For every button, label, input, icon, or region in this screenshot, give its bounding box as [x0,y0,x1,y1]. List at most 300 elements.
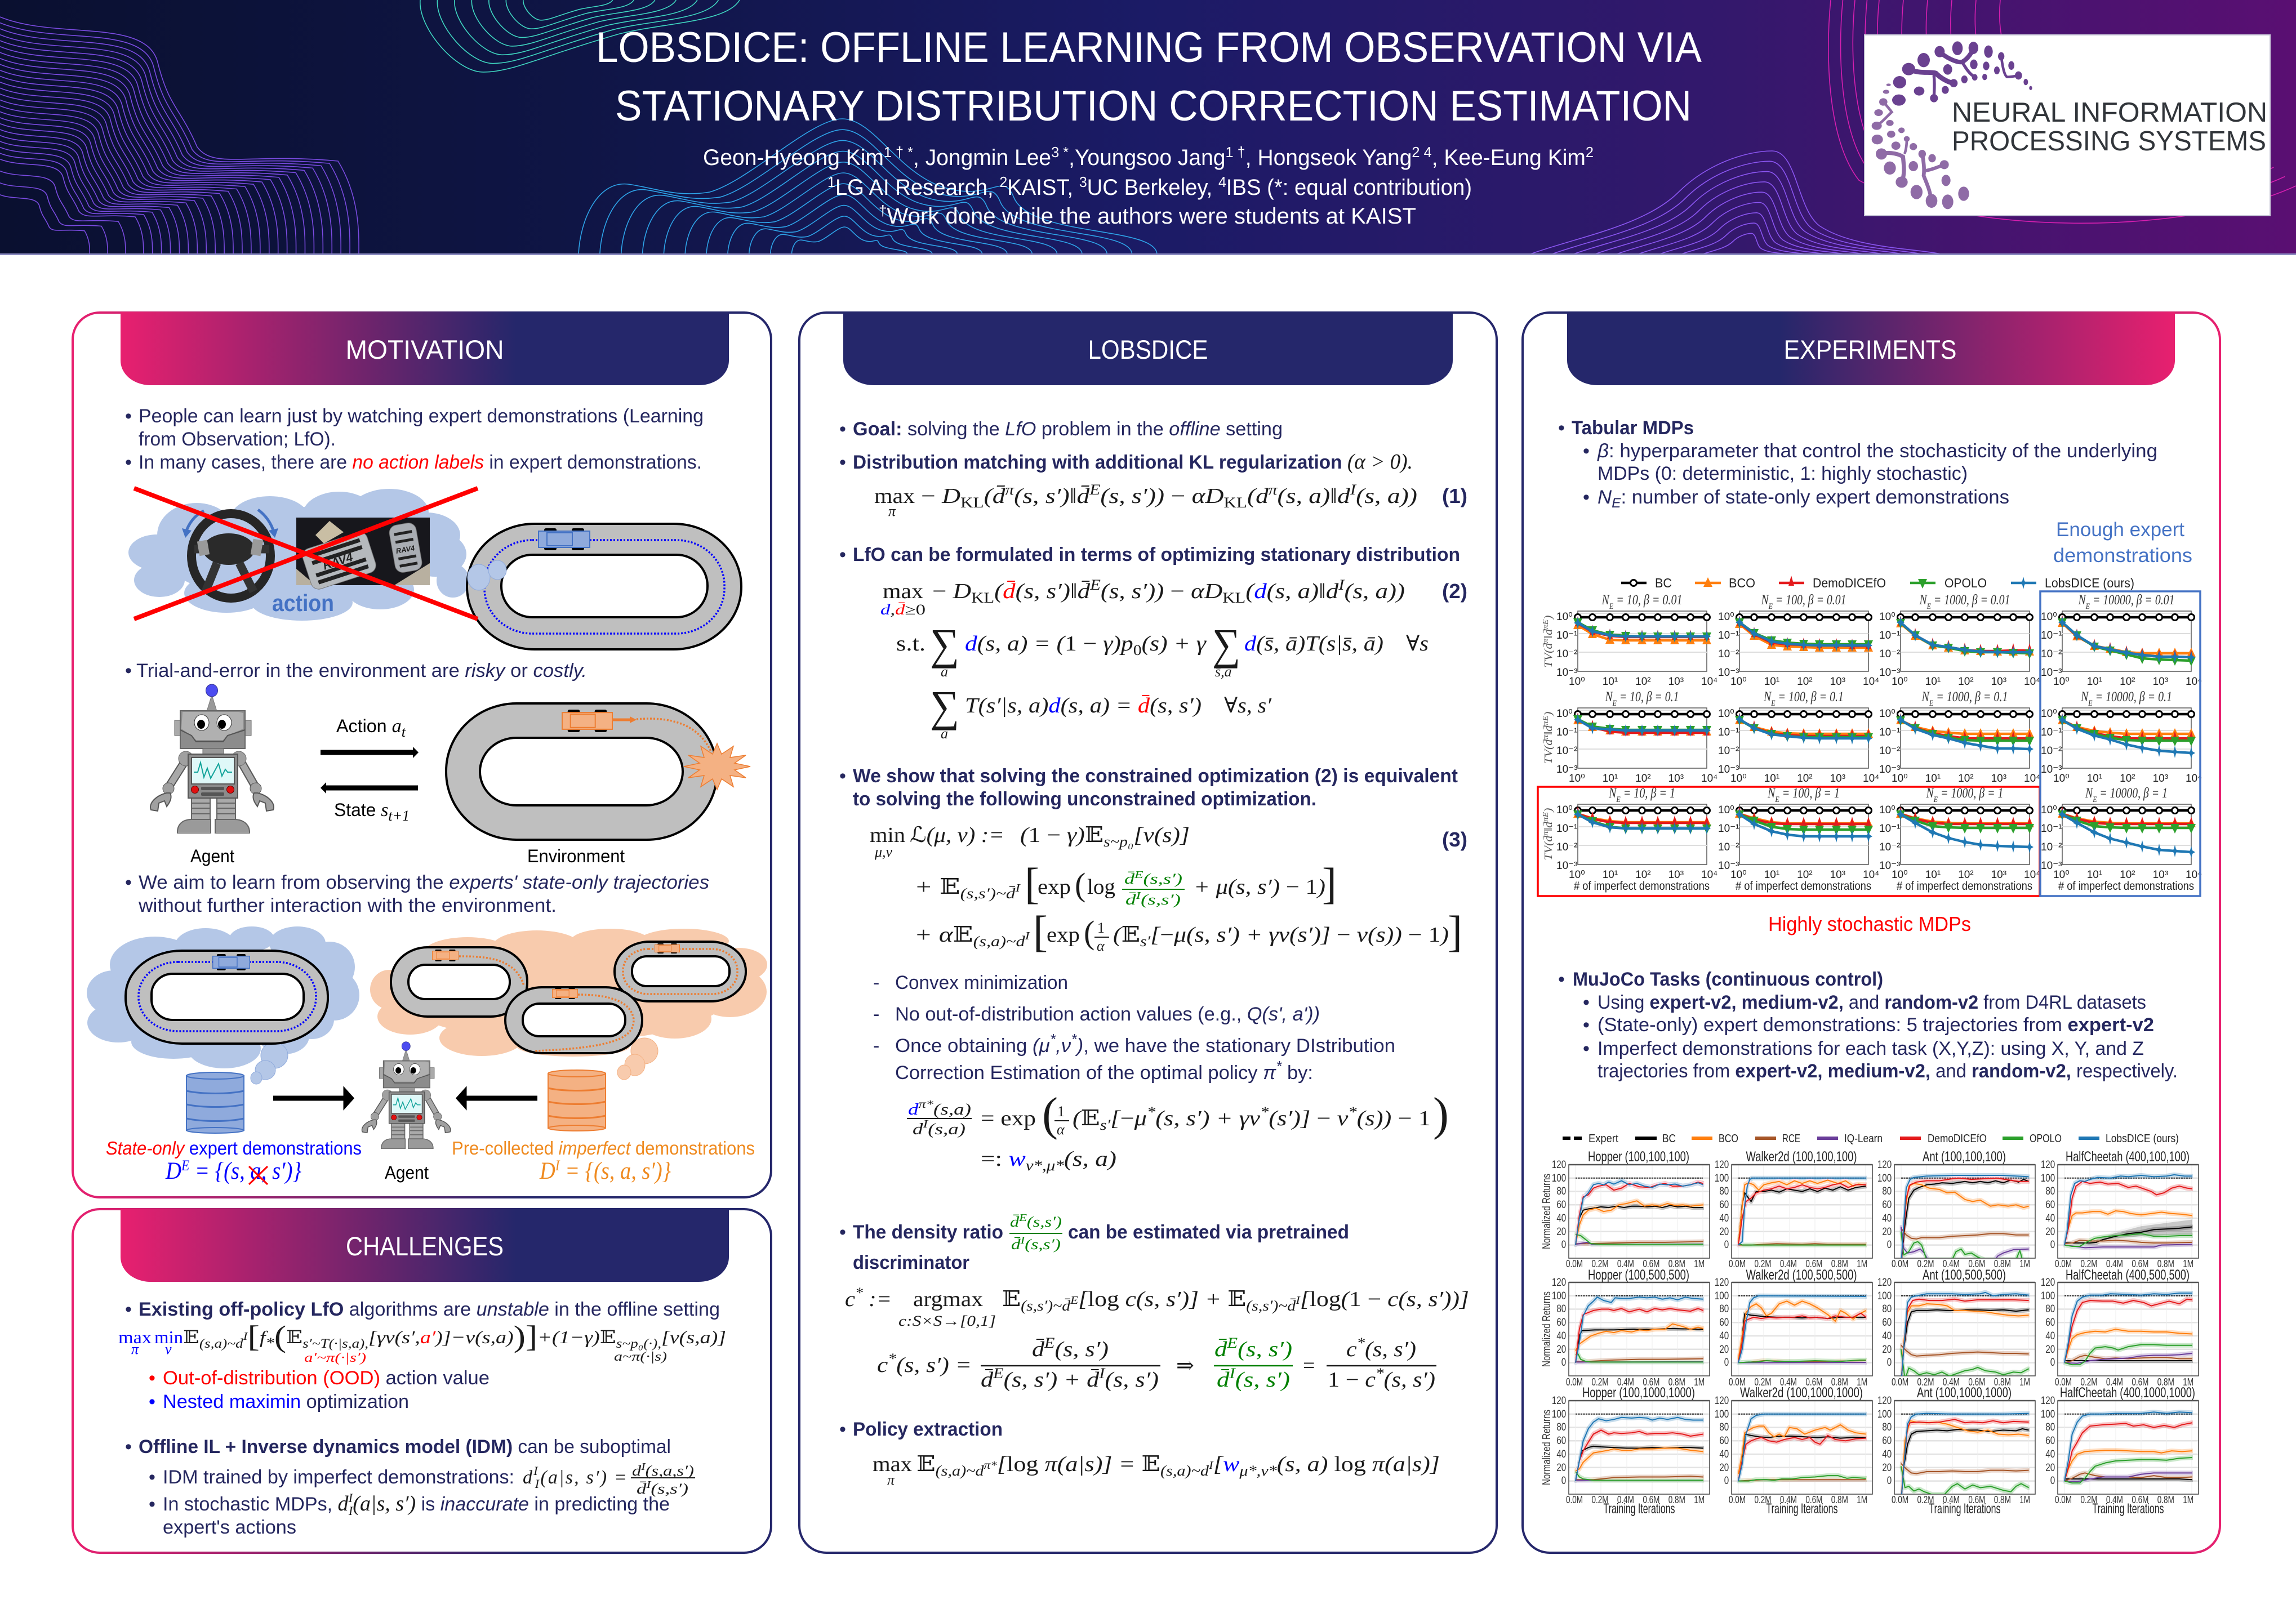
chart: Walker2d 100,100,100: 100 [1715,1171,1729,1184]
legend: tabular: BC [1655,576,1672,590]
chart: NE 10000 beta 0.01: 10⁻¹ [2041,630,2062,641]
text: learning from observation: • [125,406,132,427]
icon: pedals photo: RAV4 [321,551,355,573]
chart: Hopper 100,100,100 [1552,1149,1710,1269]
text: MuJoCo tasks: Using expert-v2, medium-v2, and random-v2 from D4RL datasets [1598,992,2146,1013]
chart: NE 10000 beta 1: 10⁰ 10¹ 10² 10³ 10⁴ [2053,869,2202,881]
equation: policy extraction: 𝔼(s,a)~d π*[log π(a|s)] = 𝔼(s,a)~d I[wμ*,ν*(s, a) log π(a|s)] [916,1452,1440,1479]
chart: NE 1000 beta 0.1: 10⁻¹ [1879,727,1901,738]
chart: NE 1000 beta 1: # of imperfect demonstrations [1897,880,2032,893]
chart: NE 100 beta 0.01: NE = 100, β = 0.01 [1761,592,1846,611]
text: density ratio: can be estimated via pretrained [1068,1222,1349,1243]
equation 3 [870,823,1467,956]
chart: Ant 100,100,100: 60 [1882,1198,1892,1210]
equation: optimal ratio: α [1057,1121,1065,1138]
formula: offline LfO objective: max [118,1327,152,1347]
text: tabular MDPs: β: hyperparameter that control the stochasticity of the underlying [1597,440,2157,462]
red cross over actions [134,488,478,619]
chart: Walker2d 100,500,500: 40 [1719,1329,1729,1342]
y axis labels: Normalized Returns [1541,1291,1553,1367]
chart: NE 10 beta 1: 10⁻¹ [1556,823,1577,835]
title: LOBSDICE: OFFLINE LEARNING FROM OBSERVATION VIA [596,24,1702,72]
chart: Hopper 100,100,100: Hopper (100,100,100) [1588,1149,1689,1165]
equation: policy extraction: π [887,1472,895,1488]
chart: Ant 100,100,100: 40 [1882,1211,1892,1224]
equation: policy extraction [873,1452,1440,1488]
panel: challenges [73,1209,771,1553]
chart: NE 1000 beta 0.01: NE = 1000, β = 0.01 [1919,592,2010,611]
y axis labels: TV(d̄π‖d̄πE) [1542,615,1555,667]
equation 3: exp [1038,875,1071,899]
icon: imperfect database [548,1070,606,1131]
chart: NE 100 beta 0.1 [1718,689,1879,785]
chart: NE 100 beta 0.1: 10⁻² [1718,745,1739,757]
chart: Walker2d 100,500,500 [1715,1267,1872,1388]
chart: Hopper 100,1000,1000: 0 [1561,1474,1566,1486]
chart: Hopper 100,500,500: 80 [1556,1302,1566,1314]
chart: Walker2d 100,500,500: 0 [1724,1356,1729,1368]
logo mark: lower dots [1872,83,1969,209]
chart: Ant 100,100,100 [1877,1149,2035,1269]
chart: Hopper 100,1000,1000: 0.0M 0.2M 0.4M 0.6M 0.8M 1M [1566,1494,1705,1505]
chart: NE 10 beta 0.1: 10⁻¹ [1556,727,1577,738]
chart: Walker2d 100,1000,1000: 100 [1715,1407,1729,1420]
chart: Hopper 100,100,100: 0.0M 0.2M 0.4M 0.6M 0.8M 1M [1566,1258,1705,1269]
equation: optimal discriminator [845,1285,1469,1392]
equation 3: + 𝔼 (s,s′)~d̄ I [914,875,1021,902]
chart: Ant 100,1000,1000: Ant (100,1000,1000) [1917,1385,2012,1401]
text: LfO as stationary distribution: • [839,544,846,565]
chart: NE 10000 beta 0.1: NE = 10000, β = 0.1 [2080,689,2172,708]
equation 3: ] [1322,859,1337,908]
equation 3: ℒ(μ, ν) := [910,823,1004,847]
equation 3: (1 − γ)𝔼s~p₀[ν(s)] [1020,823,1190,850]
chart: Walker2d 100,100,100: 80 [1719,1184,1729,1197]
heading: lobsdice [843,312,1453,385]
chart: NE 100 beta 0.1: 10⁻³ [1718,764,1739,776]
chart: NE 10000 beta 0.01: 10⁰ [2041,611,2057,623]
chart: Walker2d 100,100,100: 0.0M 0.2M 0.4M 0.6M 0.8M 1M [1729,1258,1867,1269]
panel frame [73,313,771,1197]
chart: Hopper 100,500,500: 0 [1561,1356,1566,1368]
chart: NE 1000 beta 1 [1879,786,2040,893]
chart: NE 10 beta 0.01: 10⁰ 10¹ 10² 10³ 10⁴ [1569,676,1717,688]
chart: Walker2d 100,1000,1000: 20 [1719,1461,1729,1473]
chart: NE 1000 beta 0.1: 10⁰ [1879,708,1895,720]
equation: optimal discriminator: c:S×S→[0,1] [898,1313,996,1329]
text: goal: • [839,418,846,440]
chart: Walker2d 100,1000,1000: 0.0M 0.2M 0.4M 0.6M 0.8M 1M [1729,1494,1867,1505]
text: tabular MDPs: NE: number of state-only expert demonstrations [1598,487,2009,511]
chart: Ant 100,1000,1000: 40 [1882,1447,1892,1460]
equation 2 [880,577,1467,742]
formula: offline LfO objective: 𝔼(s,a)~d I[f*(𝔼s′~T(·|s,a), [γν(s′, a′)]−ν(s,a) )]+(1−γ) 𝔼s~p₀(·), [ν(s,a)] [183,1320,726,1353]
formula: offline LfO objective: π [131,1341,139,1357]
equation: optimal discriminator: d̄E(s, s′) + d̄ I(s, s′) [981,1365,1159,1392]
chart: NE 1000 beta 1: 10⁰ 10¹ 10² 10³ 10⁴ [1892,869,2040,881]
icon: expert database [186,1072,244,1133]
equation 2: ∑ [930,620,959,669]
text: no out-of-distribution: - [873,1004,879,1025]
annotation: enough expert demonstrations: Enough expert [2056,519,2184,541]
chart: Hopper 100,500,500: 100 [1552,1289,1566,1302]
arrow: imperfect data to agent [459,1093,537,1104]
arrow: state [326,785,418,791]
equation 3: [ [1025,859,1039,908]
text: IDM trained by imperfect demonstrations: IDM trained by imperfect demonstrations: [163,1467,514,1488]
equation: optimal ratio: (𝔼s′[−μ*(s, s′) + γν *(s′)] − ν*(s)) − 1 [1073,1104,1431,1133]
caption: state-only expert demonstrations: State-only expert demonstrations [106,1138,362,1158]
chart: Walker2d 100,1000,1000: 0 [1724,1474,1729,1486]
chart: Walker2d 100,500,500: 60 [1719,1316,1729,1328]
chart: NE 100 beta 0.01: 10⁰ 10¹ 10² 10³ 10⁴ [1730,676,1879,688]
chart: NE 10 beta 0.1: 10⁻² [1556,745,1577,757]
chart: Walker2d 100,100,100: 120 [1715,1158,1729,1170]
chart: NE 10000 beta 0.01 [2041,592,2202,688]
chart: Hopper 100,100,100: 20 [1556,1225,1566,1237]
chart: Walker2d 100,1000,1000: 60 [1719,1434,1729,1446]
equation: optimal discriminator: argmax [913,1287,983,1311]
equation 1: − D KL(d̄π(s, s′)‖d̄ E(s, s′)) − αD KL(dπ(s, a)‖d I(s, a)) [921,482,1417,511]
text: distribution matching: Distribution matching with additional KL regularization (α > 0). [853,450,1413,474]
chart: NE 10 beta 1: # of imperfect demonstrations [1574,880,1710,893]
legend: MuJoCo: IQ-Learn [1844,1133,1883,1145]
decorative line waves [0,0,2296,254]
chart: NE 10000 beta 0.1: 10⁻³ [2041,764,2062,776]
chart: NE 1000 beta 1: NE = 1000, β = 1 [1926,786,2003,804]
banner background [0,0,2296,254]
heading: experiments [1567,312,2175,385]
title [596,24,1702,130]
chart: NE 10 beta 1: 10⁻³ [1556,860,1577,872]
chart: HalfCheetah 400,500,500: 60 [2045,1316,2055,1328]
chart: NE 1000 beta 1: 10⁰ [1879,804,1895,816]
text: IDM trained by imperfect demonstrations: • [149,1467,155,1488]
chart: Ant 100,100,100: Ant (100,100,100) [1923,1149,2006,1165]
chart: NE 10 beta 0.01: 10⁻³ [1556,667,1577,679]
chart: NE 10 beta 0.1: 10⁰ [1556,708,1573,720]
legend: MuJoCo: RCE [1782,1133,1800,1145]
chart: NE 1000 beta 0.01: 10⁰ 10¹ 10² 10³ 10⁴ [1892,676,2040,688]
chart: NE 100 beta 1: 10⁻³ [1718,860,1739,872]
equation 3: + μ(s, s′) − 1) [1194,875,1325,899]
text: existing off-policy LfO: • [125,1299,132,1320]
equation: optimal ratio: = exp [981,1107,1036,1130]
chart: NE 1000 beta 0.01: 10⁰ [1879,611,1895,623]
text: stochastic MDPs [149,1491,670,1538]
label: action: action [272,590,334,616]
chart: NE 100 beta 0.01: 10⁻¹ [1718,630,1739,641]
chart: Hopper 100,500,500: 60 [1556,1316,1566,1328]
chart: HalfCheetah 400,100,100: 60 [2045,1198,2055,1210]
chart: Hopper 100,1000,1000 [1552,1385,1710,1517]
text: MuJoCo tasks: (State-only) expert demonstrations: 5 trajectories from expert-v2 [1598,1014,2154,1036]
chart: NE 100 beta 1: # of imperfect demonstrations [1736,880,1871,893]
text: offline IL plus IDM: Offline IL + Inverse dynamics model (IDM) can be suboptimal [139,1436,671,1458]
chart: NE 10000 beta 0.1: 10⁻² [2041,745,2062,757]
text: MuJoCo tasks: trajectories from expert-v2, medium-v2, and random-v2, respectively. [1598,1060,2178,1082]
text: density ratio: discriminator [853,1252,969,1273]
text: tabular MDPs [1558,417,2157,511]
chart: Hopper 100,1000,1000: 100 [1552,1407,1566,1420]
chart: HalfCheetah 400,1000,1000: 60 [2045,1434,2055,1446]
chart: NE 1000 beta 0.1: NE = 1000, β = 0.1 [1921,689,2008,708]
text: MuJoCo tasks: • [1583,1038,1590,1059]
panel frame [799,313,1497,1553]
illustration: environment crash track [446,703,750,840]
chart: Ant 100,500,500: 120 [1877,1276,1892,1288]
chart: Walker2d 100,1000,1000: 40 [1719,1447,1729,1460]
text: trial and error: Trial-and-error in the environment are risky or costly. [136,660,587,681]
text: convex minimization: - [873,972,879,993]
legend: tabular: OPOLO [1945,576,1987,590]
chart: NE 10 beta 1: NE = 10, β = 1 [1608,786,1675,804]
chart: NE 10 beta 1: 10⁰ 10¹ 10² 10³ 10⁴ [1569,869,1717,881]
text: stochastic MDPs: expert's actions [163,1517,296,1538]
chart: HalfCheetah 400,500,500: 0.0M 0.2M 0.4M 0.6M 0.8M 1M [2055,1376,2193,1388]
chart: NE 100 beta 0.1: 10⁰ [1718,708,1734,720]
chart: NE 1000 beta 1: 10⁻¹ [1879,823,1901,835]
equation 2: − D KL(d̄(s, s′)‖d̄ E(s, s′)) − αD KL(d(s, a)‖d I(s, a)) [932,577,1405,606]
chart: Ant 100,100,100: 0 [1887,1238,1892,1250]
chart: NE 10000 beta 1: 10⁰ [2041,804,2057,816]
authors: Geon-Hyeong Kim1 † *, Jongmin Lee3 *,Youngsoo Jang1 †, Hongseok Yang2 4, Kee-Eung Kim2 [703,144,1594,170]
equation 3: d̄ E(s,s′) [1124,869,1182,887]
text: stationary distribution correction: Once obtaining (μ*,ν*), we have the stationary DIstribution [895,1031,1395,1057]
chart: HalfCheetah 400,1000,1000: 20 [2045,1461,2055,1473]
chart: NE 1000 beta 0.1: 10⁻² [1879,745,1901,757]
chart: Ant 100,100,100: 100 [1877,1171,1892,1184]
chart: Ant 100,100,100: 20 [1882,1225,1892,1237]
label: action a_t: Action at [336,716,406,740]
text: offline IL plus IDM: • [125,1436,132,1458]
equation 2: max [883,580,923,603]
text: state-only trajectories: without further interaction with the environment. [138,895,557,916]
chart: NE 10000 beta 1: NE = 10000, β = 1 [2085,786,2168,804]
chart: HalfCheetah 400,100,100: 0.0M 0.2M 0.4M 0.6M 0.8M 1M [2055,1258,2193,1269]
chart: Ant 100,100,100: 0.0M 0.2M 0.4M 0.6M 0.8M 1M [1892,1258,2030,1269]
chart: Hopper 100,100,100: 40 [1556,1211,1566,1224]
equation 2: ∑ [930,681,959,730]
chart: NE 10000 beta 1: 10⁻³ [2041,860,2062,872]
chart: Walker2d 100,500,500: 120 [1715,1276,1729,1288]
y axis labels: Normalized Returns [1541,1174,1553,1249]
chart: HalfCheetah 400,1000,1000: 80 [2045,1420,2055,1433]
formula: offline LfO objective [118,1320,726,1365]
affiliations: 1LG AI Research, 2KAIST, 3UC Berkeley, 4IBS (*: equal contribution) [827,173,1472,200]
text: LfO as stationary distribution: LfO can be formulated in terms of optimizing stationary distribution [853,544,1460,565]
text: state-only trajectories: • [125,872,132,893]
chart: Walker2d 100,100,100: 0 [1724,1238,1729,1250]
chart: Ant 100,1000,1000: Training Iterations [1929,1501,2001,1517]
panel frame [73,1209,771,1553]
text: MuJoCo tasks: • [1583,1014,1590,1036]
chart: Ant 100,1000,1000: 100 [1877,1407,1892,1420]
text: MuJoCo tasks: • [1583,992,1590,1013]
text: existing off-policy LfO: Existing off-policy LfO algorithms are unstable in the offline setting [139,1299,720,1320]
y axis labels [1541,1174,1553,1485]
arrow: action [321,750,413,755]
chart: Hopper 100,1000,1000: Hopper (100,1000,1000) [1582,1385,1695,1401]
text: density ratio [839,1212,1349,1273]
chart: NE 10 beta 0.1: 10⁻³ [1556,764,1577,776]
chart: Hopper 100,1000,1000: 120 [1552,1394,1566,1406]
chart: Walker2d 100,1000,1000: Walker2d (100,1000,1000) [1740,1385,1863,1401]
thought bubbles [437,564,469,598]
highlight box: highly stochastic [1538,787,2040,896]
equation: optimal ratio: ( [1042,1088,1058,1140]
text: MuJoCo tasks: Imperfect demonstrations for each task (X,Y,Z): using X, Y, and Z [1598,1038,2144,1059]
arrow head: state [321,782,326,794]
equation: optimal discriminator: 𝔼(s,s′)~d̄ E[log c(s, s′)] + 𝔼(s,s′)~d̄ I[log(1 − c(s, s′))] [1002,1287,1469,1314]
equation: optimal ratio: dI(s,a) [913,1118,965,1138]
chart: HalfCheetah 400,500,500: 80 [2045,1302,2055,1314]
chart grid: tabular MDP results [1538,591,2202,896]
chart: NE 1000 beta 1: 10⁻² [1879,841,1901,853]
chart: Ant 100,500,500: 0.0M 0.2M 0.4M 0.6M 0.8M 1M [1892,1376,2030,1388]
chart: Walker2d 100,100,100: 60 [1719,1198,1729,1210]
text: policy extraction: • [839,1419,846,1440]
chart: NE 10000 beta 0.1 [2041,689,2202,785]
chart: Hopper 100,1000,1000: Training Iterations [1603,1501,1675,1517]
text: unconstrained equivalence [839,765,1458,810]
chart: NE 1000 beta 0.01: 10⁻³ [1879,667,1901,679]
chart: NE 100 beta 0.1: 10⁻¹ [1718,727,1739,738]
equation 3: ( [1084,914,1094,951]
chart: HalfCheetah 400,500,500: 100 [2041,1289,2055,1302]
equation 1: (1) [1442,484,1467,507]
chart: Hopper 100,500,500: 0.0M 0.2M 0.4M 0.6M 0.8M 1M [1566,1376,1705,1388]
text: stationary distribution correction: - [873,1035,879,1057]
equation 2: T(s′|s, a) d(s, a) = d̄(s, s′) [965,694,1202,718]
panel: experiments [1523,312,2220,1553]
text: stationary distribution correction [873,1031,1395,1084]
chart: Ant 100,1000,1000: 20 [1882,1461,1892,1473]
equation 2: s.t. [896,632,925,656]
text: tabular MDPs: • [1583,487,1590,508]
heading: experiments: EXPERIMENTS [1783,335,1957,364]
chart: NE 100 beta 0.01: 10⁻³ [1718,667,1739,679]
chart: NE 1000 beta 0.01: 10⁻¹ [1879,630,1901,641]
chart: Ant 100,100,100: 120 [1877,1158,1892,1170]
chart: NE 10 beta 0.1: 10⁰ 10¹ 10² 10³ 10⁴ [1569,773,1717,785]
illustration: expert thought cloud [87,926,359,1084]
equation 3: + α 𝔼 (s,a)~d I [914,923,1031,950]
chart: HalfCheetah 400,1000,1000: 100 [2041,1407,2055,1420]
legend: MuJoCo [1563,1133,2179,1145]
label: agent: Agent [190,846,234,866]
chart: HalfCheetah 400,1000,1000: 0 [2050,1474,2055,1486]
text: policy extraction: Policy extraction [853,1419,1003,1440]
equation 3: [ [1033,907,1048,956]
caption: imperfect demonstrations: Pre-collected imperfect demonstrations [452,1138,755,1158]
chart: Walker2d 100,500,500: 100 [1715,1289,1729,1302]
chart: NE 10000 beta 1: # of imperfect demonstrations [2058,880,2194,893]
chart: Ant 100,100,100: 80 [1882,1184,1892,1197]
chart: Walker2d 100,100,100: Walker2d (100,100,100) [1746,1149,1857,1165]
chart: Hopper 100,1000,1000: 60 [1556,1434,1566,1446]
title: STATIONARY DISTRIBUTION CORRECTION ESTIMATION [615,82,1692,130]
equation 3: d̄ I(s,s′) [1125,890,1181,908]
chart: NE 10 beta 0.01: NE = 10, β = 0.01 [1601,592,1683,611]
text: no out-of-distribution: No out-of-distribution action values (e.g., Q(s', a')) [895,1004,1320,1025]
chart: Ant 100,500,500: 80 [1882,1302,1892,1314]
chart: Ant 100,500,500: 20 [1882,1343,1892,1355]
text: learning from observation: from Observation; LfO). [139,429,336,450]
text: trial and error: • [125,660,132,681]
equation: policy extraction: max [873,1452,912,1476]
chart: Walker2d 100,1000,1000: 120 [1715,1394,1729,1406]
equation 1: max [874,484,915,508]
chart: Hopper 100,100,100: 60 [1556,1198,1566,1210]
equation 3: log [1087,875,1115,899]
chart: NE 1000 beta 1: 10⁻³ [1879,860,1901,872]
formula: offline LfO objective: a′~π(·|s′) [304,1351,366,1365]
y axis labels: TV(d̄π‖d̄πE) [1542,808,1555,860]
icon: robot agent [150,684,274,834]
equation 2: d(s̄, ā)T(s|s̄, ā) [1244,632,1383,656]
text: MuJoCo tasks [1558,969,2178,1082]
equation: optimal discriminator: d̄E(s, s′) [1214,1335,1292,1361]
text: convex minimization: Convex minimization [895,972,1068,993]
annotation: enough expert demonstrations [2053,519,2192,567]
equation 2: (2) [1442,580,1467,603]
chart: NE 100 beta 1: 10⁰ 10¹ 10² 10³ 10⁴ [1730,869,1879,881]
legend: MuJoCo: DemoDICEfO [1928,1133,1987,1145]
equation 3: ( [1075,866,1085,903]
chart: NE 10 beta 1: 10⁰ [1556,804,1573,816]
chart: Walker2d 100,100,100: 40 [1719,1211,1729,1224]
equation: optimal discriminator: = [1303,1354,1315,1378]
formula: IDM: dI I(a|s, s′) = [523,1464,627,1491]
chart: Ant 100,500,500 [1877,1267,2035,1388]
header banner [0,0,2296,255]
text: stationary distribution correction: Correction Estimation of the optimal policy π* by: [895,1058,1313,1084]
chart: Hopper 100,1000,1000: 80 [1556,1420,1566,1433]
annotation: highly stochastic MDPs: Highly stochastic MDPs [1768,912,1971,935]
chart: NE 10 beta 0.01: 10⁻² [1556,648,1577,660]
chart: Ant 100,500,500: Ant (100,500,500) [1923,1267,2006,1283]
chart: NE 10000 beta 0.1: 10⁻¹ [2041,727,2062,738]
chart: Walker2d 100,100,100: 20 [1719,1225,1729,1237]
equation: optimal discriminator: c*(s, s′) = [877,1351,972,1377]
formula: offline LfO objective: a~π(·|s) [614,1349,667,1363]
text: state-only trajectories [125,872,709,916]
red cross on a [249,1166,268,1184]
chart: Ant 100,500,500: 100 [1877,1289,1892,1302]
illustration: thought cloud of actions [128,489,469,621]
chart: NE 100 beta 1: NE = 100, β = 1 [1767,786,1840,804]
chart: Ant 100,1000,1000: 0 [1887,1474,1892,1486]
text: stochastic MDPs: In stochastic MDPs, dI I(a|s, s′) is inaccurate in predicting the [163,1491,670,1518]
text: out-of-distribution: Out-of-distribution (OOD) action value [163,1367,490,1389]
logo: NeurIPS: NEURAL INFORMATION [1952,97,2267,128]
heading: motivation [121,312,729,385]
formula: IDM: d̄I(s,s′) [637,1479,688,1497]
text: nested maximin: • [149,1391,155,1412]
text: density ratio: d̄E(s,s′) [1010,1212,1062,1230]
chart: HalfCheetah 400,1000,1000: HalfCheetah (400,1000,1000) [2060,1385,2195,1401]
chart: NE 10 beta 0.01: 10⁰ [1556,611,1573,623]
y axis labels: Normalized Returns [1541,1410,1553,1485]
equation: optimal ratio [907,1088,1449,1174]
legend: tabular: BCO [1729,576,1755,590]
chart: NE 10000 beta 1 [2041,786,2202,893]
chart: NE 1000 beta 0.1: 10⁻³ [1879,764,1901,776]
equation 2: ∀s [1406,632,1429,656]
chart: HalfCheetah 400,100,100: 100 [2041,1171,2055,1184]
chart: NE 10 beta 1: 10⁻² [1556,841,1577,853]
